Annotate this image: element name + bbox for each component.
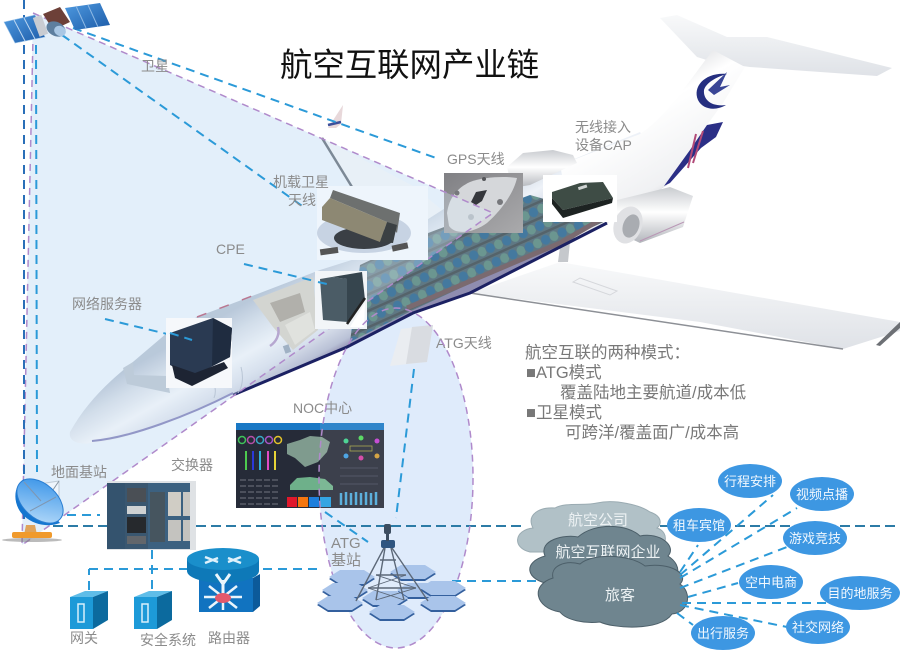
bubble: in-flight e-commerce <box>739 565 803 599</box>
NOC center label and dashboard: NOC中心 <box>293 400 352 416</box>
lower engine <box>608 187 693 248</box>
satellite coverage area <box>22 13 493 545</box>
aviation internet enterprise cloud: 航空互联网企业 <box>555 543 661 561</box>
service links <box>677 495 830 627</box>
CPE label and photo: CPE <box>216 241 245 257</box>
bubble: travel schedule: 行程安排 <box>724 474 776 489</box>
network server label and photo <box>72 296 232 388</box>
switch label and rack <box>107 457 213 550</box>
bubble: social network: 社交网络 <box>792 620 844 635</box>
bubble: gaming: 游戏竞技 <box>789 531 841 546</box>
satellite <box>4 3 110 43</box>
modes description: 可跨洋/覆盖面广/成本高 <box>565 423 739 442</box>
near wing <box>470 242 900 349</box>
wireless access CAP label and photo <box>543 119 632 222</box>
tail stripes <box>664 122 723 186</box>
passenger cloud <box>538 556 688 627</box>
network server label and photo: 网络服务器 <box>72 296 142 312</box>
bubble: video on demand <box>790 477 854 511</box>
bubble: gaming <box>783 521 847 555</box>
bubble: travel schedule <box>718 464 782 498</box>
router icon and label <box>187 548 260 646</box>
bubble: video on demand: 视频点播 <box>796 487 848 502</box>
bubble: car rental and hotel: 租车宾馆 <box>673 518 725 533</box>
airline cloud <box>518 502 665 552</box>
door seams <box>213 367 242 398</box>
ATG antenna label and icon: ATG天线 <box>436 335 492 351</box>
bubble: travel services: 出行服务 <box>697 626 749 641</box>
cabin cutaway with seats <box>350 195 612 342</box>
ground station label and dish <box>2 464 107 542</box>
horizontal stabilizer <box>660 15 892 76</box>
bubble: car rental and hotel <box>667 508 731 542</box>
modes description: ■ATG模式 <box>526 363 602 382</box>
ATG base station: hex ground and tower <box>317 524 466 621</box>
ATG coverage outline <box>319 308 473 648</box>
bubble: travel services <box>691 616 755 650</box>
satellite antenna label and photo <box>273 174 428 260</box>
satellite antenna label and photo: 天线 <box>288 192 316 208</box>
switch label and rack: 交换器 <box>171 457 213 473</box>
far wing <box>320 105 448 262</box>
NOC center label and dashboard <box>236 400 384 508</box>
bubble: social network <box>786 610 850 644</box>
ATG antenna label and icon <box>390 325 492 366</box>
bubble: destination services <box>820 576 900 610</box>
GPS antenna label: GPS天线 <box>447 151 505 167</box>
airline cloud: 航空公司 <box>568 512 628 529</box>
modes description: 航空互联的两种模式： <box>525 343 690 362</box>
gateway icon and label <box>70 591 108 646</box>
cabin interior <box>253 277 318 354</box>
ATG coverage ellipse fill <box>319 308 473 648</box>
ground station label and dish: 地面基站 <box>51 464 107 480</box>
label: ATG base station: 基站 <box>331 552 361 569</box>
upper engine <box>507 150 577 188</box>
modes description: 覆盖陆地主要航道/成本低 <box>560 383 746 402</box>
belly stripe <box>92 214 610 441</box>
gateway icon and label: 网关 <box>70 630 98 646</box>
tail logo <box>697 72 730 109</box>
modes description: ■卫星模式 <box>526 403 602 422</box>
label: ATG base station <box>331 535 361 569</box>
label: ATG base station: ATG <box>331 535 361 552</box>
router icon and label: 路由器 <box>208 630 250 646</box>
modes description <box>525 343 746 442</box>
wireless access CAP label and photo: 设备CAP <box>575 137 632 153</box>
fuselage <box>70 132 667 444</box>
bubble: in-flight e-commerce: 空中电商 <box>745 575 797 590</box>
coverage tint over plane <box>22 13 493 545</box>
rear fuselage and fin <box>560 50 745 240</box>
label: satellite: 卫星 <box>141 58 169 74</box>
CPE label and photo <box>216 241 367 329</box>
security system icon and label <box>134 591 196 648</box>
GPS antenna photo <box>444 173 523 233</box>
title: 航空互联网产业链 <box>280 47 539 83</box>
coverage outlines <box>22 13 493 545</box>
cockpit window <box>123 362 170 393</box>
airplane <box>70 15 900 444</box>
wireless access CAP label and photo: 无线接入 <box>575 119 631 135</box>
security system icon and label: 安全系统 <box>140 632 196 648</box>
satellite antenna label and photo: 机载卫星 <box>273 174 329 190</box>
passenger cloud: 旅客 <box>605 587 635 604</box>
aviation internet enterprise cloud <box>530 526 678 584</box>
bubble: destination services: 目的地服务 <box>827 586 893 601</box>
